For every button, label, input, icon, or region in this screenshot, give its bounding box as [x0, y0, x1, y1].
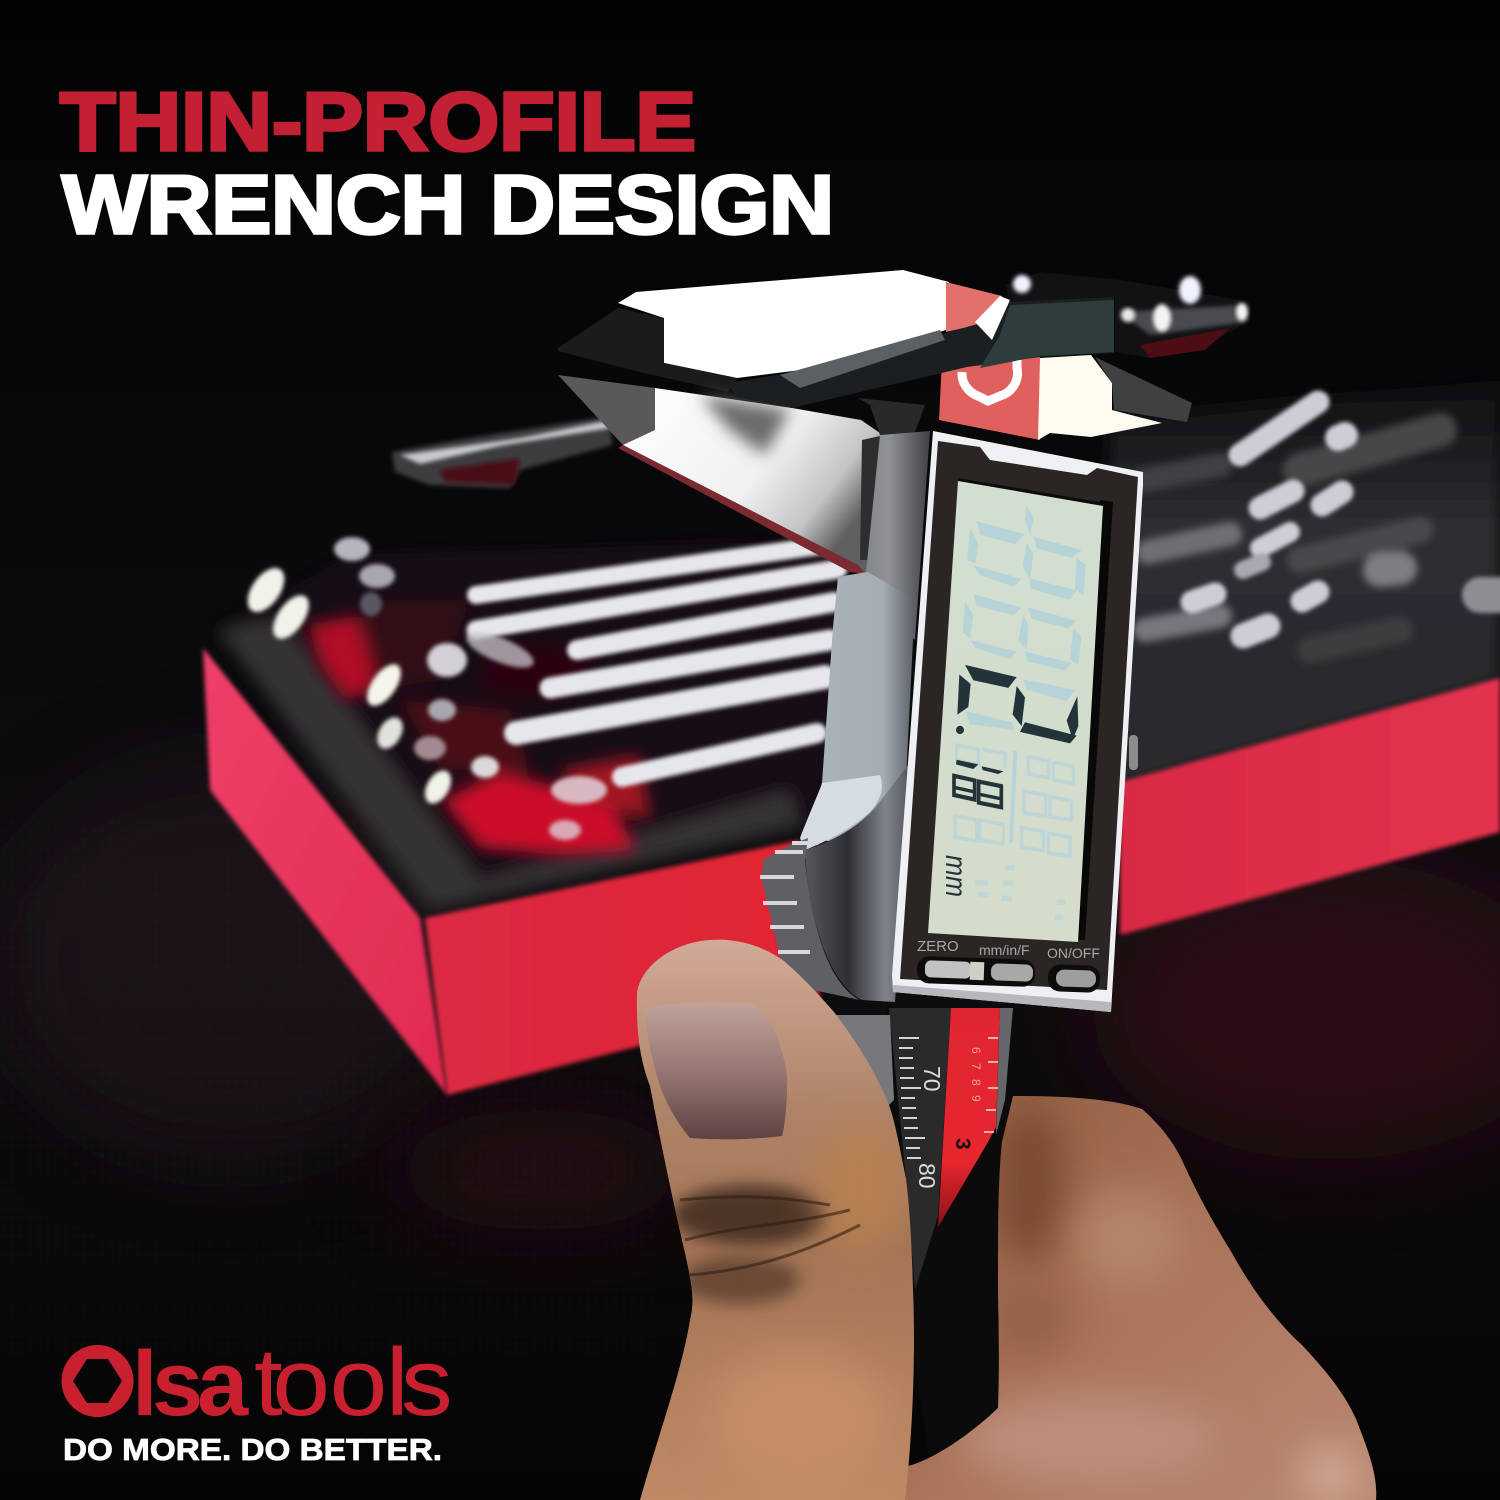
- inactive segments: [955, 506, 1086, 917]
- metric scale numbers: [914, 1047, 983, 1189]
- blurred wrench heads left: [240, 537, 607, 840]
- lcd digit segments: [954, 506, 1086, 917]
- digital caliper: [558, 270, 1250, 1462]
- unit label mm: mm: [939, 855, 972, 897]
- brand logo: tools: [254, 1329, 453, 1436]
- side knob: [1129, 735, 1138, 770]
- thumbwheel: [760, 838, 860, 1000]
- wrench held in caliper, left end: [392, 416, 612, 488]
- thumbnail: [645, 1002, 787, 1139]
- caliper upper jaw, left: [558, 270, 949, 392]
- tray front red face: [425, 840, 820, 1095]
- button label mm/in/F: mm/in/F: [979, 942, 1030, 958]
- blurred wrenches right: [1145, 430, 1440, 650]
- hand: fingers behind caliper: [900, 1090, 1390, 1500]
- metric scale numbers: 3: [951, 1138, 974, 1150]
- button label ON/OFF: ON/OFF: [1047, 945, 1100, 961]
- metric scale numbers: 80: [914, 1163, 940, 1189]
- red slider strip with logo mark: [939, 282, 1040, 440]
- active segments reading 2.18: [954, 665, 1078, 807]
- on off button: [1048, 964, 1100, 993]
- tray left red face: [203, 648, 447, 1095]
- caliper silver body: [800, 431, 930, 1002]
- blurred wrench handles left: [476, 544, 838, 777]
- title: [60, 75, 834, 251]
- caliper lower jaw: [558, 375, 925, 574]
- zero and mode buttons: [917, 956, 1035, 987]
- title: WRENCH DESIGN: [62, 158, 834, 251]
- tray top in black foam: [218, 380, 1500, 912]
- wrench box end with highlights: [1005, 272, 1250, 358]
- lcd screen: [1075, 500, 1113, 940]
- title: THIN-PROFILE: [60, 75, 696, 168]
- metric scale numbers: 6 7 8 9: [969, 1047, 983, 1102]
- tagline: DO MORE. DO BETTER.: [63, 1432, 442, 1467]
- display bezel: [892, 431, 1143, 1012]
- foam tray with wrenches, out of focus: [203, 380, 1500, 1095]
- logo hex O mark: [62, 1345, 134, 1417]
- button label ZERO: ZERO: [917, 938, 959, 955]
- caliper beam scale: [834, 1005, 1013, 1462]
- hand: thumb: [630, 930, 930, 1500]
- caliper upper jaw, right: [1038, 355, 1192, 440]
- held wrench crossing the jaws: [728, 296, 1114, 408]
- metric scale numbers: 70: [919, 1066, 945, 1092]
- tray right red face: [1120, 678, 1500, 935]
- red wrench recesses: [308, 600, 650, 855]
- skin creases: [680, 1197, 860, 1275]
- brand logo: [62, 1329, 453, 1467]
- brand logo: lsa: [132, 1333, 249, 1435]
